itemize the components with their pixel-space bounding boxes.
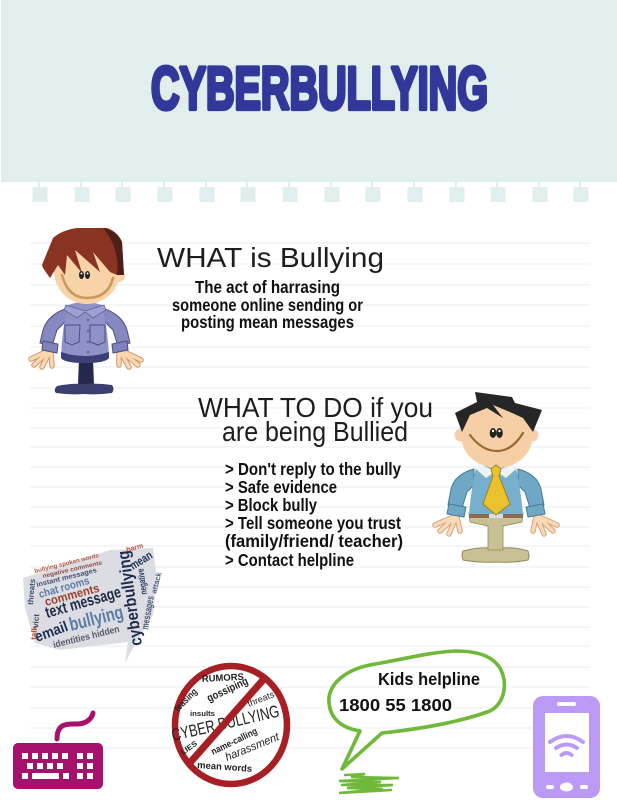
icon: word cloud speech bubble: email	[33, 618, 70, 646]
icon: word cloud speech bubble: attack	[149, 570, 164, 595]
icon: no cyberbullying sign: name-calling	[209, 726, 259, 758]
icon: no cyberbullying sign: gossiping	[205, 675, 250, 705]
icon: word cloud speech bubble: instant messages	[36, 567, 98, 589]
text block: definition: someone online sending or	[172, 295, 363, 315]
icon: word cloud speech bubble: negative	[135, 568, 150, 595]
heading: what is bullying: WHAT is Bullying	[157, 242, 384, 273]
icon: word cloud speech bubble: messages	[140, 595, 157, 631]
icon: word cloud speech bubble: bullying spoken words	[34, 553, 100, 575]
callout: kids helpline speech bubble: 1800 55 1800	[339, 695, 452, 715]
icon: word cloud speech bubble	[23, 543, 164, 663]
icon: no cyberbullying sign: harassment	[224, 731, 282, 764]
icon: no cyberbullying sign: insults	[190, 709, 215, 718]
text block: advice list: > Contact helpline	[225, 550, 354, 570]
icon: word cloud speech bubble: bullying	[67, 602, 126, 636]
text block: advice list: > Tell someone you trust	[225, 513, 401, 533]
heading: what to do: are being Bullied	[222, 416, 408, 447]
icon: word cloud speech bubble: negative comments	[42, 560, 104, 580]
text block: definition: posting mean messages	[181, 312, 354, 332]
icon: word cloud speech bubble: talk	[29, 625, 39, 640]
icon: no cyberbullying sign: teasing	[172, 686, 200, 714]
heading: what to do	[198, 392, 433, 447]
icon: word cloud speech bubble: threats	[26, 578, 37, 605]
icon: keyboard	[13, 713, 103, 789]
icon: no cyberbullying sign: mean words	[197, 760, 252, 775]
icon: man with yellow tie	[435, 392, 557, 562]
text block: advice list: > Don't reply to the bully	[225, 459, 401, 479]
icon: word cloud speech bubble: comments	[43, 581, 101, 609]
text block: definition: The act of harrasing	[195, 277, 340, 297]
callout: kids helpline speech bubble	[329, 651, 504, 793]
icon: no cyberbullying sign: RUMORS	[202, 672, 244, 685]
callout: kids helpline speech bubble: Kids helpline	[378, 669, 480, 689]
icon: no cyberbullying sign: LIES	[179, 739, 199, 757]
text block: advice list: > Block bully	[225, 495, 317, 515]
icon: word cloud speech bubble: identities hidden	[52, 624, 121, 651]
icon: no cyberbullying sign	[170, 666, 287, 784]
icon: no cyberbullying sign: threats	[246, 689, 276, 709]
icon: word cloud speech bubble: cyberbullying	[114, 549, 146, 647]
text block: advice list: (family/friend/ teacher)	[225, 531, 403, 551]
heading: what to do: WHAT TO DO if you	[198, 392, 433, 423]
icon: no cyberbullying sign: CYBER BULLYING	[170, 702, 281, 745]
text block: advice list: > Safe evidence	[225, 477, 337, 497]
text block: definition	[172, 277, 363, 332]
icon: word cloud speech bubble: mean	[127, 548, 155, 573]
text block: advice list	[225, 459, 403, 570]
icon: word cloud speech bubble: harm	[126, 543, 144, 554]
icon: smartphone with wifi	[533, 696, 600, 798]
icon: word cloud speech bubble: vict	[31, 613, 41, 628]
icon: word cloud speech bubble: chat rooms	[38, 575, 91, 601]
icon: word cloud speech bubble: text message	[43, 584, 123, 622]
header panel with notepad tabs	[1, 0, 617, 202]
icon: boy with brown hair	[31, 228, 141, 394]
